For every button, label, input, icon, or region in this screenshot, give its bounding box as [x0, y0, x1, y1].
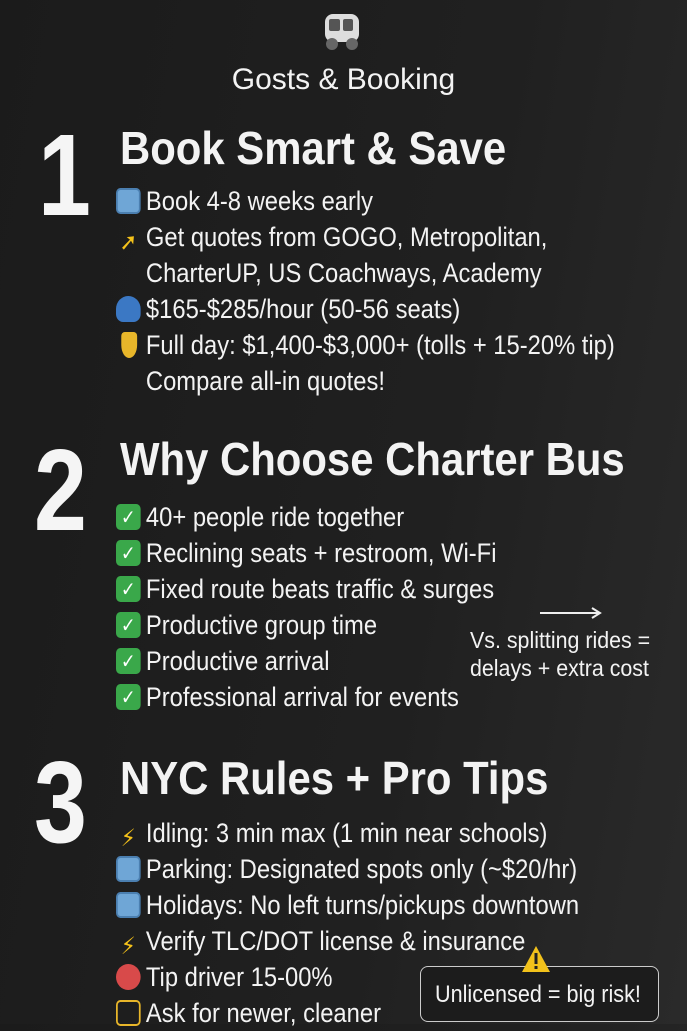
- heading 2: Why Choose Charter Bus: [120, 433, 625, 485]
- callout: unlicensed warning: [420, 966, 659, 1022]
- heading 1: Book Smart & Save: [120, 122, 506, 174]
- number 1: 1: [38, 110, 91, 240]
- callout: unlicensed warning: Unlicensed = big risk!: [435, 981, 641, 1008]
- list 2: 40+ people ride together: [146, 502, 404, 532]
- list 1: CharterUP, US Coachways, Academy: [146, 258, 542, 288]
- list 2: ✓: [121, 685, 136, 709]
- list 2: ✓: [121, 577, 136, 601]
- heading 3: NYC Rules + Pro Tips: [120, 752, 548, 804]
- list 3: Verify TLC/DOT license & insurance: [146, 926, 525, 956]
- list 1: ➚: [119, 228, 137, 256]
- number 2: 2: [34, 425, 87, 555]
- list 3: Holidays: No left turns/pickups downtown: [146, 890, 579, 920]
- list 2: ✓: [121, 541, 136, 565]
- callout: vs splitting: Vs. splitting rides =: [470, 627, 650, 653]
- title: Gosts & Booking: [232, 63, 455, 96]
- list 3: Parking: Designated spots only (~$20/hr): [146, 854, 577, 884]
- list 1: Full day: $1,400-$3,000+ (tolls + 15-20% tip): [146, 330, 615, 360]
- number 3: 3: [34, 737, 87, 867]
- list 3: [116, 818, 579, 1028]
- list 3: Tip driver 15-00%: [146, 962, 333, 992]
- list 2: Reclining seats + restroom, Wi-Fi: [146, 538, 496, 568]
- list 2: Productive group time: [146, 610, 377, 640]
- list 2: ✓: [121, 613, 136, 637]
- callout: vs splitting: [470, 627, 650, 681]
- list 1: Book 4-8 weeks early: [146, 186, 373, 216]
- list 1: Get quotes from GOGO, Metropolitan,: [146, 222, 547, 252]
- list 2: ✓: [121, 505, 136, 529]
- panel: section 1: [38, 110, 615, 396]
- callout: vs splitting: delays + extra cost: [470, 655, 649, 681]
- list 2: [116, 502, 496, 712]
- list 1: $165-$285/hour (50-56 seats): [146, 294, 460, 324]
- list 2: Fixed route beats traffic & surges: [146, 574, 494, 604]
- list 2: Productive arrival: [146, 646, 329, 676]
- list 2: Professional arrival for events: [146, 682, 459, 712]
- list 3: ⚡: [121, 932, 136, 960]
- arrow: [540, 607, 602, 619]
- list 3: Ask for newer, cleaner: [146, 998, 381, 1028]
- list 1: Compare all-in quotes!: [146, 366, 385, 396]
- panel: section 3: [34, 737, 659, 1028]
- panel: section 2: [34, 425, 650, 712]
- icon: warning: [522, 946, 550, 972]
- list 3: Idling: 3 min max (1 min near schools): [146, 818, 547, 848]
- list 2: ✓: [121, 649, 136, 673]
- list 1: [116, 186, 615, 396]
- icon: car: [325, 14, 359, 50]
- list 3: ⚡: [121, 824, 136, 852]
